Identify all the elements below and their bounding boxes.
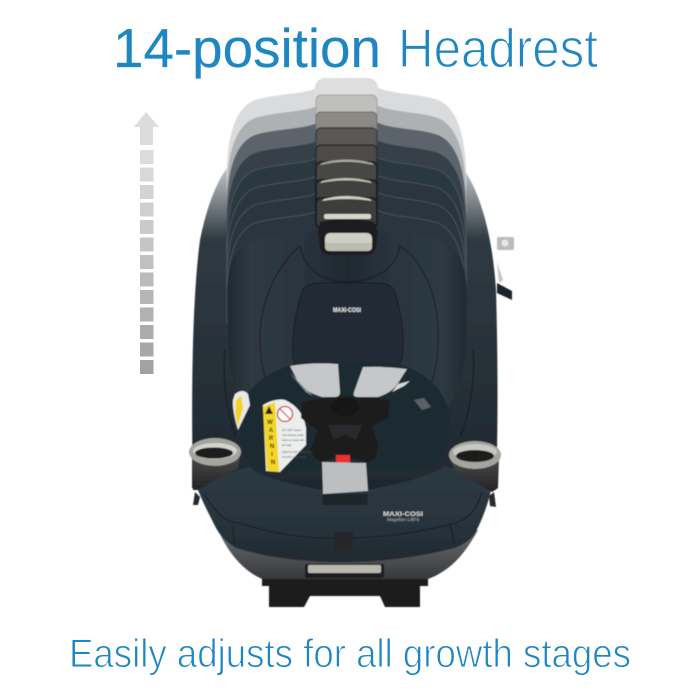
crotch pad [322, 462, 368, 505]
title [113, 17, 598, 79]
harness shoulder pads [289, 363, 410, 397]
harness chest clip [301, 396, 390, 462]
buckle red button [336, 455, 350, 465]
warning label: N [271, 460, 275, 466]
subtitle: Easily adjusts for all growth stages [69, 632, 631, 676]
warning label: N [270, 444, 274, 450]
brand logo: MAXI-COSI [333, 308, 361, 314]
side badge [414, 398, 431, 410]
chest cushion [240, 362, 450, 470]
headrest adjust handle [318, 219, 378, 255]
warning label: INJURY can occur [282, 455, 307, 459]
warning label: air bag [282, 443, 292, 447]
headrest [227, 228, 467, 420]
warning label: W [267, 420, 273, 426]
ghost headrest tab stack [315, 78, 378, 228]
black base feet [262, 578, 428, 607]
warning label: I [271, 452, 273, 458]
headrest centre pad [293, 283, 403, 366]
front recline lever [334, 532, 353, 550]
headrest seam lines [260, 246, 438, 410]
car seat [189, 78, 514, 607]
side wing shadows [224, 350, 474, 436]
side cup holder left [189, 438, 241, 505]
seat branding [383, 511, 423, 522]
warning label: DEATH OR SERIOUS [282, 450, 312, 454]
ghost headrest positions [227, 86, 466, 323]
warning label: R [269, 436, 274, 442]
seat branding: MAXI-COSI [383, 511, 423, 518]
small warning label [233, 391, 250, 430]
title: Headrest [398, 17, 598, 79]
seat back shell [192, 155, 498, 490]
warning label: seat on seat with [282, 438, 305, 442]
base handle [305, 564, 384, 578]
warning label: DO NOT place [282, 428, 302, 432]
warning label: rear-facing child [282, 433, 304, 437]
grey base shell [218, 530, 478, 579]
cushion seam lines [205, 492, 482, 545]
warning label: A [269, 428, 274, 434]
side tags [497, 237, 514, 300]
title: 14-position [113, 17, 381, 79]
seat branding: Magellan LiftFit [387, 517, 420, 522]
warning label [263, 400, 312, 472]
icon: upward progress arrow [134, 112, 159, 374]
seat cushion [198, 466, 491, 562]
side cup holder right [449, 441, 501, 507]
